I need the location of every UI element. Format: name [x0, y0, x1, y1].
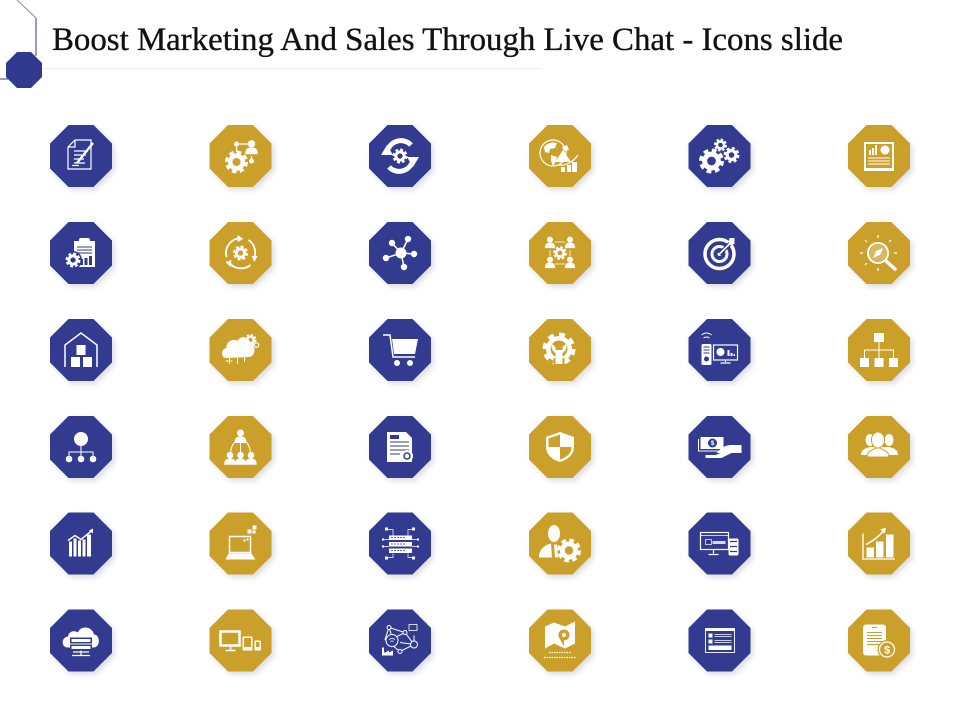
icon: gear in three arrows	[210, 222, 272, 284]
icon: target with arrow	[688, 222, 750, 284]
icon: cloud server	[50, 610, 112, 672]
icon: shopping cart	[369, 319, 431, 381]
icon: warehouse with boxes	[50, 319, 112, 381]
icon grid	[50, 125, 910, 672]
icon: globe with growth chart	[529, 125, 591, 187]
icon: gear in circular arrows	[369, 125, 431, 187]
icon: tablet report	[848, 125, 910, 187]
icon: hand with money: $	[711, 440, 715, 447]
icon: three people	[848, 416, 910, 478]
icon: manager and team	[210, 416, 272, 478]
icon: hand with money	[688, 416, 750, 478]
icon: growth bars	[50, 512, 112, 574]
icon: server network	[369, 512, 431, 574]
icon: map with pin	[529, 610, 591, 672]
icon: connected network with wifi	[369, 610, 431, 672]
icon: browser window list	[688, 610, 750, 672]
icon: magnifier with compass	[848, 222, 910, 284]
icon: shield	[529, 416, 591, 478]
icon: remote and monitor	[688, 319, 750, 381]
icon: document with pen	[50, 125, 112, 187]
icon: cloud with gears	[210, 319, 272, 381]
icon: gear with person network	[210, 125, 272, 187]
icon: three gears	[688, 125, 750, 187]
header ornament	[0, 0, 42, 88]
icon: bar chart with arrow	[848, 512, 910, 574]
icon: org chart squares	[848, 319, 910, 381]
icon: document with gear	[369, 416, 431, 478]
icon: invoice with dollar	[848, 610, 910, 672]
icon: invoice with dollar: $	[884, 644, 890, 656]
icon: businessman with gear	[529, 512, 591, 574]
title: Boost Marketing And Sales Through Live Chat - Icons slide	[52, 22, 843, 58]
icon: hierarchy circles	[50, 416, 112, 478]
icon: laptop with pixels	[210, 512, 272, 574]
icon: gear with wrench	[529, 319, 591, 381]
icon: clipboard with gear and bars	[50, 222, 112, 284]
icon: team around gear	[529, 222, 591, 284]
icon: computer and mobile devices	[210, 610, 272, 672]
icon: hub network	[369, 222, 431, 284]
icon: monitor and phone	[688, 512, 750, 574]
